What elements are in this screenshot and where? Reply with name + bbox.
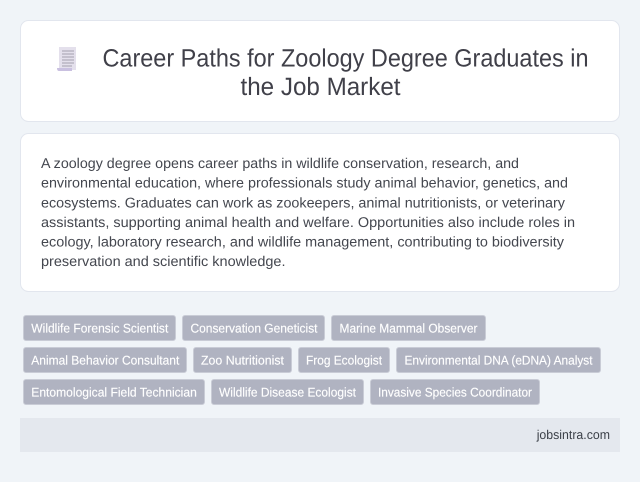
title: Career Paths for Zoology Degree Graduates in xyxy=(102,44,588,72)
title: the Job Market xyxy=(240,73,401,101)
tag: Wildlife Disease Ecologist: Wildlife Disease Ecologist xyxy=(219,385,356,399)
tag: Frog Ecologist: Frog Ecologist xyxy=(306,353,382,367)
tag: Environmental DNA (eDNA) Analyst: Environmental DNA (eDNA) Analyst xyxy=(404,353,593,367)
tag: Frog Ecologist xyxy=(298,348,390,372)
tag: Wildlife Disease Ecologist xyxy=(212,380,364,404)
tag: Wildlife Forensic Scientist xyxy=(24,316,176,340)
tag: Entomological Field Technician xyxy=(24,380,204,404)
tag: Wildlife Forensic Scientist: Wildlife Forensic Scientist xyxy=(31,321,169,335)
footer bar xyxy=(20,418,620,452)
tag: Zoo Nutritionist xyxy=(194,348,292,372)
panel: title card xyxy=(20,20,620,122)
panel: description card xyxy=(20,134,620,292)
tag: Animal Behavior Consultant xyxy=(24,348,186,372)
text block: description: ecosystems. Graduates can work as zookeepers, animal nutritionists, or veterinary xyxy=(41,196,566,212)
tag: Zoo Nutritionist: Zoo Nutritionist xyxy=(201,353,284,367)
tag: Invasive Species Coordinator xyxy=(370,380,540,404)
text block: description: assistants, supporting animal health and welfare. Opportunities also include roles in xyxy=(41,215,575,231)
tag: Invasive Species Coordinator: Invasive Species Coordinator xyxy=(378,385,532,399)
tag: Environmental DNA (eDNA) Analyst xyxy=(396,348,600,372)
title xyxy=(102,44,588,101)
panel: career tags xyxy=(24,316,600,404)
tag: Marine Mammal Observer xyxy=(332,316,486,340)
tag: Conservation Geneticist xyxy=(182,316,324,340)
tag: Animal Behavior Consultant: Animal Behavior Consultant xyxy=(31,353,180,367)
text block: description: ecology, laboratory research, and wildlife management, contributing to biodiversity xyxy=(41,234,565,250)
text block: description: environmental education, where professionals study animal behavior, genetics, and xyxy=(41,176,568,192)
icon: document scroll xyxy=(57,47,76,71)
text block: description: preservation and scientific knowledge. xyxy=(41,254,286,270)
tag: Marine Mammal Observer: Marine Mammal Observer xyxy=(340,321,478,335)
tag: Conservation Geneticist: Conservation Geneticist xyxy=(190,321,318,335)
footer text: source: jobsintra.com xyxy=(536,427,610,442)
text block: description xyxy=(41,156,575,270)
tag: Entomological Field Technician: Entomological Field Technician xyxy=(31,385,197,399)
text block: description: A zoology degree opens career paths in wildlife conservation, research, and xyxy=(41,156,519,172)
